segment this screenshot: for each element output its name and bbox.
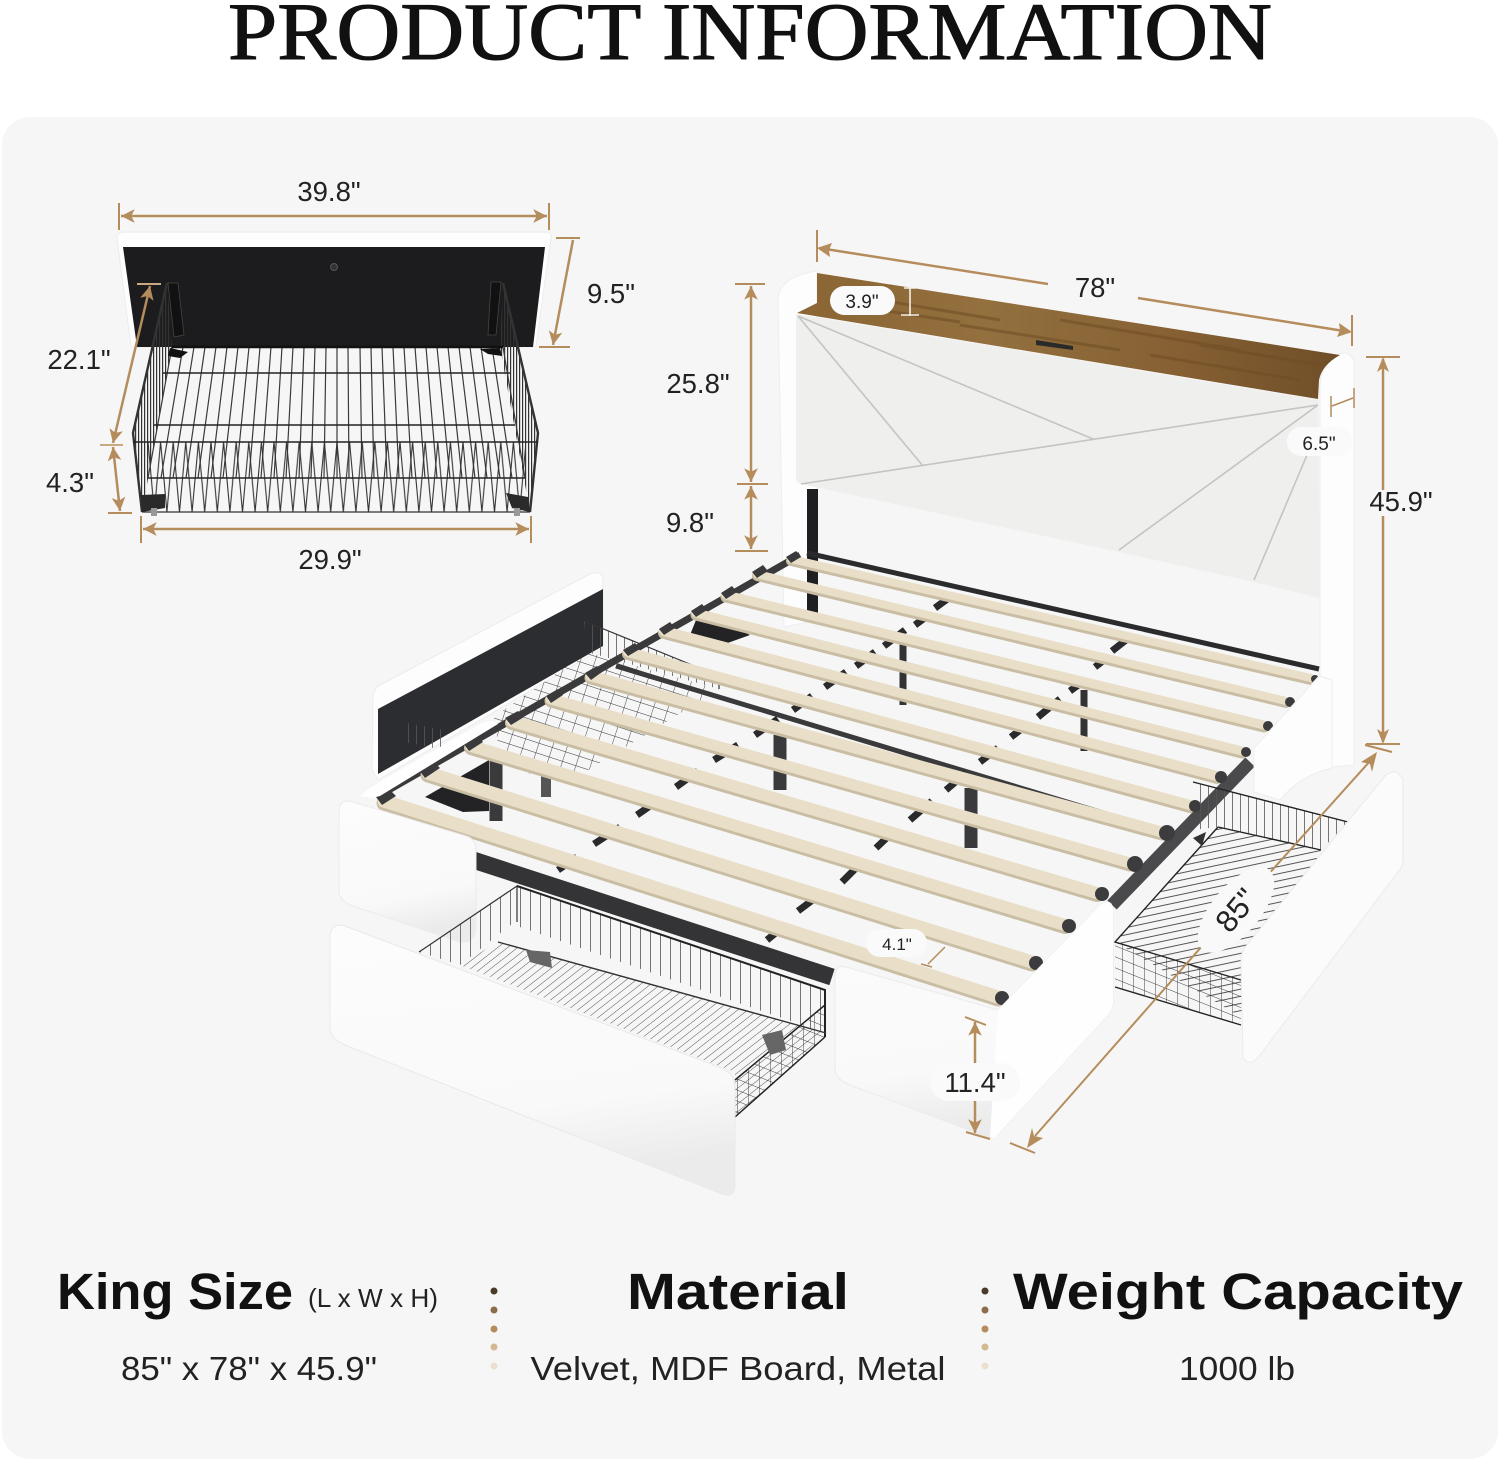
dimension: front height 9.5 [539, 238, 635, 347]
dimension: bed width 78 [817, 230, 1352, 346]
dimension: bed width 78: 78" [1075, 272, 1115, 303]
front drawer face [330, 925, 735, 1195]
callout: slat gap 4.1 [866, 929, 945, 967]
spec: weight capacity [1013, 1263, 1464, 1387]
dimension: drawer depth 22.1 [47, 284, 161, 445]
dimension: basket width 29.9: 29.9" [298, 544, 362, 575]
under-frame dark panels [425, 610, 750, 812]
right drawer face [1241, 772, 1403, 1062]
rear drawer white face [372, 573, 603, 780]
dimension: leg height 11.4 [930, 1017, 1020, 1139]
callout: wing thickness 6.5 [1287, 388, 1354, 456]
dimension: basket width 29.9 [141, 516, 531, 575]
support legs [903, 644, 1084, 751]
dimension: bed length 85 [1010, 745, 1392, 1153]
left cross rail [558, 597, 950, 870]
upholstered panel [796, 314, 1320, 598]
divider dots 1 [490, 1288, 498, 1370]
right rear corner block [1254, 676, 1332, 800]
right drawer wire basket [1115, 782, 1348, 1025]
spec: king size [57, 1263, 438, 1387]
right headboard wing [1320, 353, 1354, 768]
drawer front panel [117, 232, 551, 347]
usb charger slot [1036, 340, 1073, 350]
dimension: drawer width 39.8 [119, 176, 549, 230]
headboard [778, 271, 1354, 768]
dimension: headboard height 25.8: 25.8" [666, 368, 730, 399]
drawer detail view [117, 232, 551, 516]
wood grain streaks [850, 295, 1320, 380]
dimension: total height 45.9 [1366, 357, 1433, 744]
rear pulled-out drawer [372, 573, 719, 797]
slat end caps [995, 675, 1319, 1005]
callout: wing thickness 6.5: 6.5" [1302, 434, 1336, 455]
spec: material [530, 1263, 946, 1387]
front drawer wire basket [419, 886, 826, 1117]
callout: shelf height 3.9 [830, 286, 919, 316]
right rail front block [835, 902, 1113, 1138]
dimension: clearance 9.8 [666, 486, 751, 549]
left headboard wing [778, 271, 817, 627]
headboard post [807, 489, 818, 619]
wood shelf [797, 273, 1340, 399]
spec: king size: (L x W x H) [308, 1283, 438, 1313]
rear drawer wire grid [401, 621, 719, 797]
dimension: drawer height 4.3 [46, 447, 132, 513]
callout: slat gap 4.1: 4.1" [882, 935, 912, 954]
callout: shelf height 3.9: 3.9" [845, 292, 879, 313]
dimension: drawer width 39.8: 39.8" [297, 176, 361, 207]
slat left brackets [376, 551, 801, 805]
dimension: drawer depth 22.1: 22.1" [47, 344, 111, 375]
dimension: front height 9.5: 9.5" [587, 278, 635, 309]
dimension: total height 45.9: 45.9" [1369, 486, 1433, 517]
dimension: bed length 85: 85" [1208, 882, 1264, 939]
bed frame beams [380, 553, 1319, 977]
spec: weight capacity: 1000 lb [1179, 1350, 1295, 1387]
left rail top edge [360, 721, 498, 798]
spec: material: Velvet, MDF Board, Metal [530, 1350, 946, 1387]
dimension: clearance 9.8: 9.8" [666, 507, 714, 538]
spec: king size: King Size [57, 1263, 293, 1320]
dimension: headboard height 25.8 [666, 284, 768, 551]
dimension: leg height 11.4: 11.4" [944, 1067, 1006, 1098]
drawer wire basket [133, 282, 538, 516]
wooden slats [376, 551, 1319, 1005]
dimension: drawer height 4.3: 4.3" [46, 467, 94, 498]
divider dots 2 [982, 1288, 988, 1370]
panel seams [798, 316, 1318, 580]
spec: material: Material [627, 1263, 849, 1320]
rear drawer dark inside [378, 589, 603, 774]
left front corner block [339, 801, 476, 942]
spec: king size: 85" x 78" x 45.9" [121, 1350, 377, 1387]
spec: weight capacity: Weight Capacity [1013, 1263, 1464, 1320]
right cross rail [767, 640, 1126, 940]
